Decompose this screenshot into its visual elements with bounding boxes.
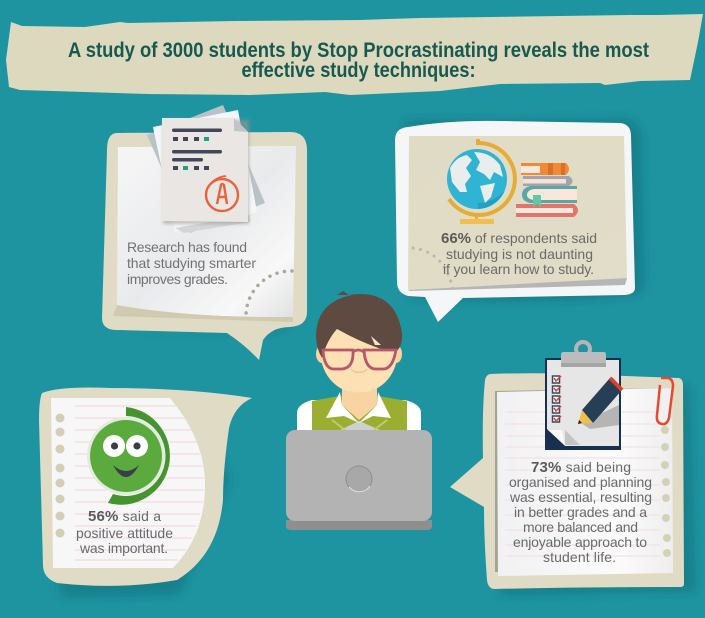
- panel: positive attitude card: [39, 388, 252, 598]
- research text: Research has found: [127, 239, 247, 255]
- organised text: [509, 459, 652, 565]
- research text: improves grades.: [127, 271, 228, 287]
- paper holes: [56, 414, 64, 538]
- globe card text: studying is not daunting: [446, 246, 593, 262]
- neck: [342, 385, 377, 420]
- research text: that studying smarter: [127, 255, 256, 271]
- organised text: in better grades and a: [514, 504, 647, 520]
- globe card text: 66% of respondents said: [441, 230, 597, 247]
- panel: organised planning card: [450, 342, 696, 596]
- icon: smiley progress: [87, 407, 170, 505]
- globe card text: [441, 230, 597, 277]
- organised text: student life.: [543, 549, 616, 565]
- organised text: was essential, resulting: [509, 489, 652, 505]
- ruled lines: [505, 412, 660, 556]
- organised text: 73% said being: [531, 459, 631, 476]
- organised text: more balanced and: [523, 519, 638, 535]
- organised text: organised and planning: [509, 474, 652, 490]
- globe card text: if you learn how to study.: [443, 261, 594, 277]
- vest: [312, 395, 407, 430]
- panel: research card: [102, 105, 307, 360]
- panel: globe and books card: [395, 118, 645, 322]
- icon: pencil: [578, 378, 622, 424]
- attitude text: positive attitude: [76, 525, 173, 541]
- icon: globe: [447, 139, 515, 224]
- icon: books: [516, 163, 578, 217]
- student with laptop: [286, 291, 432, 530]
- icon: graded paper: [147, 105, 265, 233]
- head: [316, 291, 402, 392]
- research text: [127, 239, 256, 287]
- attitude text: 56% said a: [88, 508, 161, 525]
- organised text: enjoyable approach to: [513, 534, 647, 550]
- attitude text: was important.: [79, 540, 168, 556]
- icon: clipboard: [545, 342, 622, 450]
- hair: [316, 291, 402, 358]
- checklist: [552, 376, 560, 422]
- glasses: [323, 350, 396, 369]
- ruled lines: [75, 406, 204, 560]
- shirt: [297, 400, 421, 430]
- laptop: [286, 430, 432, 530]
- paper holes: [661, 426, 671, 557]
- title text: effective study techniques:: [242, 59, 476, 82]
- icon: paper clip: [657, 378, 673, 424]
- title banner: [6, 14, 703, 95]
- collar: [326, 392, 391, 423]
- dotted arc: [413, 248, 453, 290]
- dotted arc: [246, 271, 292, 316]
- attitude text: [76, 508, 173, 556]
- title text: [68, 39, 649, 82]
